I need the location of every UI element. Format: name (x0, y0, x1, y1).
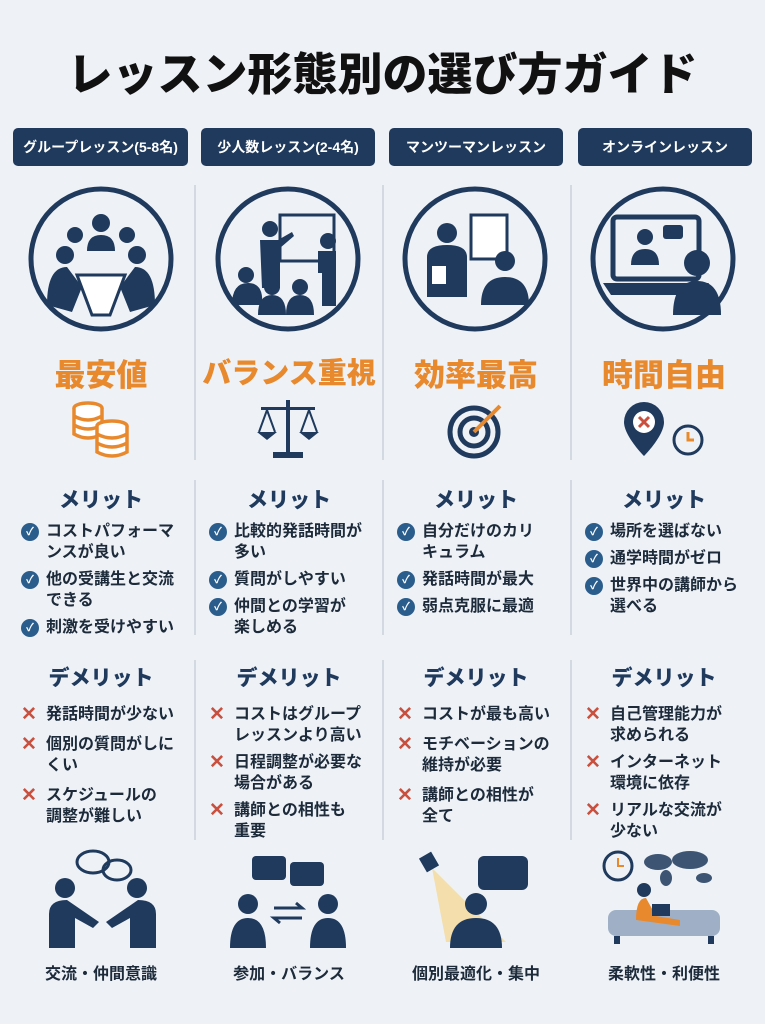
demerits col3: ✕ (397, 734, 413, 755)
demerits col1: ✕ (21, 785, 37, 806)
merits col3: 弱点克服に最適 (422, 598, 534, 615)
icon: person on sofa with world map (602, 850, 720, 944)
merits col4: 場所を選ばない (610, 523, 722, 540)
headline: cheapest: 最安値 (54, 358, 148, 393)
demerits col3: ✕ (397, 785, 413, 806)
merits col1: コストパフォーマ (46, 523, 174, 540)
demerits col1: 発話時間が少ない (46, 706, 174, 723)
demerits col2: コストはグループ (234, 706, 361, 723)
demerits col1: ✕ (21, 734, 37, 755)
footer label col1: 交流・仲間意識 (45, 966, 157, 983)
merits col4: 選べる (610, 598, 658, 615)
icon: online (590, 186, 736, 332)
demerits col3 (397, 704, 550, 825)
icon: location + timer (624, 402, 704, 456)
icon: presentation (216, 186, 360, 332)
demerits col4: 少ない (610, 823, 658, 840)
demerits col3: ✕ (397, 704, 413, 725)
merits col2: 質問がしやすい (234, 571, 346, 588)
tab: small (201, 128, 375, 166)
merits col2: 楽しめる (234, 619, 298, 636)
icon: handshake chat (49, 850, 156, 948)
demerits col2: ✕ (209, 704, 225, 725)
merits col3: ✓ (402, 526, 410, 538)
footer label col2: 参加・バランス (233, 966, 345, 983)
demerits col2: ✕ (209, 800, 225, 821)
merit heading col3: メリット (434, 489, 518, 512)
merit heading col1: メリット (59, 489, 143, 512)
demerits col2: レッスンより高い (234, 727, 362, 744)
icon: exchange (230, 856, 346, 948)
merits col1: ✓ (26, 574, 34, 586)
demerits col1: ✕ (21, 704, 37, 725)
merits col3: ✓ (402, 574, 410, 586)
footer label col4: 柔軟性・利便性 (608, 966, 720, 983)
merit heading col2: メリット (247, 489, 331, 512)
demerits col4: 自己管理能力が (610, 706, 722, 723)
merits col1 (21, 522, 174, 637)
merits col3: キュラム (422, 544, 486, 561)
merits col2: 比較的発話時間が (234, 523, 362, 540)
demerits col1: くい (46, 757, 78, 774)
demerits col2: ✕ (209, 752, 225, 773)
demerits col4: インターネット (610, 754, 722, 771)
demerit heading col4: デメリット (612, 667, 716, 690)
tab: one-on-one (389, 128, 563, 166)
merits col4: ✓ (590, 553, 598, 565)
icon: one-on-one (402, 186, 548, 332)
tab: small: 少人数レッスン(2-4名) (217, 139, 359, 155)
merits col2: ✓ (214, 601, 222, 613)
headline: time freedom: 時間自由 (602, 358, 726, 393)
merits col2: 多い (234, 544, 266, 561)
demerits col3: 全て (422, 808, 454, 825)
headline: efficiency: 効率最高 (414, 358, 538, 393)
demerits col1: スケジュールの (46, 787, 157, 804)
demerits col4: ✕ (585, 752, 601, 773)
tab: online: オンラインレッスン (602, 139, 728, 155)
merits col2: ✓ (214, 574, 222, 586)
headline: balance: バランス重視 (202, 358, 376, 390)
demerits col4: 環境に依存 (610, 775, 690, 792)
merits col1: 他の受講生と交流 (46, 571, 174, 588)
demerits col2: 重要 (234, 823, 266, 840)
demerits col3: 維持が必要 (422, 757, 502, 774)
merits col1: ✓ (26, 526, 34, 538)
merits col3: 自分だけのカリ (422, 523, 534, 540)
merits col3: ✓ (402, 601, 410, 613)
merits col1: 刺激を受けやすい (46, 619, 174, 636)
demerits col4: 求められる (610, 727, 690, 744)
demerits col4 (585, 704, 722, 840)
demerit heading col2: デメリット (236, 667, 342, 690)
demerits col3: 講師との相性が (422, 787, 534, 804)
icon: coins (72, 401, 129, 458)
demerits col2 (209, 704, 362, 840)
icon: group meeting (28, 186, 174, 332)
tab: group: グループレッスン(5-8名) (23, 139, 178, 155)
merits col1: できる (46, 592, 94, 609)
merits col1: ✓ (26, 622, 34, 634)
demerits col3: モチベーションの (422, 736, 550, 753)
merits col4: 世界中の講師から (610, 577, 738, 594)
demerits col1: 個別の質問がしに (46, 736, 174, 753)
icon: scales (257, 400, 319, 458)
merit heading col4: メリット (622, 489, 706, 512)
demerits col1 (21, 704, 174, 825)
icon: target (448, 404, 502, 458)
demerit heading col1: デメリット (48, 667, 154, 690)
demerits col2: 日程調整が必要な (234, 754, 362, 771)
merits col4: ✓ (590, 580, 598, 592)
demerits col3: コストが最も高い (422, 706, 550, 723)
merits col2: ✓ (214, 526, 222, 538)
merits col2 (209, 522, 362, 636)
demerit heading col3: デメリット (424, 667, 528, 690)
merits col4: ✓ (590, 526, 598, 538)
demerits col4: ✕ (585, 800, 601, 821)
demerits col4: リアルな交流が (610, 802, 722, 819)
merits col4: 通学時間がゼロ (610, 550, 722, 567)
demerits col4: ✕ (585, 704, 601, 725)
demerits col2: 講師との相性も (234, 802, 346, 819)
merits col4 (585, 522, 738, 615)
tab: one-on-one: マンツーマンレッスン (406, 139, 546, 155)
merits col3 (397, 522, 534, 616)
title: レッスン形態別の選び方ガイド (67, 49, 698, 100)
merits col3: 発話時間が最大 (422, 571, 534, 588)
tab: online (578, 128, 752, 166)
icon: spotlight speaker (419, 852, 528, 948)
merits col1: ンスが良い (46, 544, 126, 561)
footer label col3: 個別最適化・集中 (412, 966, 540, 983)
tab: group (13, 128, 188, 166)
merits col2: 仲間との学習が (234, 598, 346, 615)
demerits col2: 場合がある (234, 775, 314, 792)
demerits col1: 調整が難しい (46, 808, 142, 825)
